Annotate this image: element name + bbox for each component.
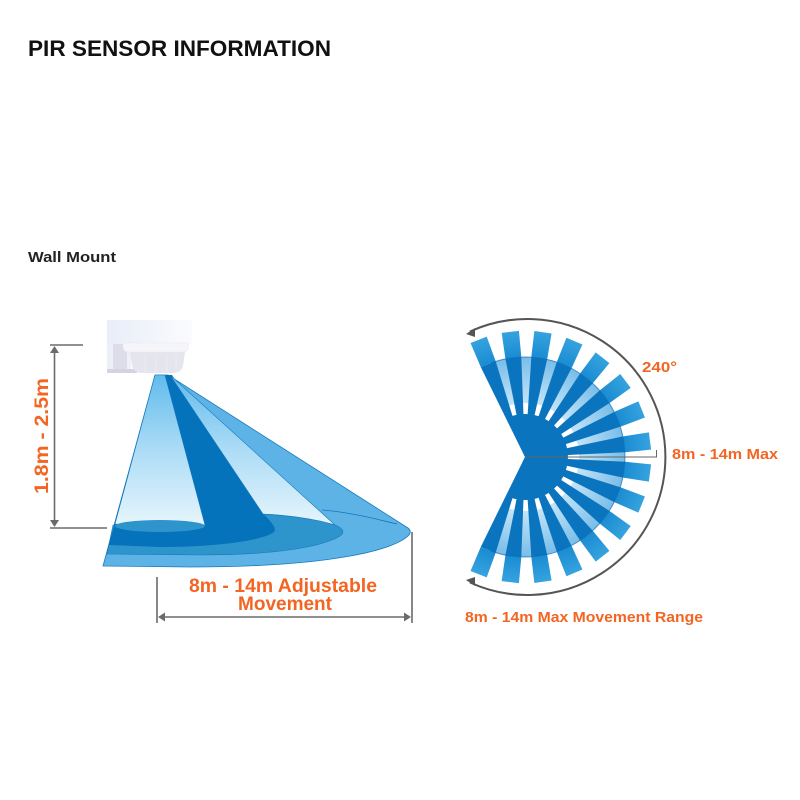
height label: 1.8m - 2.5m xyxy=(31,378,53,494)
central dark sector xyxy=(507,414,568,500)
radius line xyxy=(525,450,656,457)
upper detection bars xyxy=(471,331,651,466)
height dimension arrow xyxy=(50,345,107,528)
outer zone inner contour xyxy=(322,510,397,524)
light ring xyxy=(491,357,625,557)
middle detection ellipse xyxy=(107,514,343,555)
subheading: wall mount: Wall Mount xyxy=(28,249,116,266)
outer detection zone xyxy=(103,375,410,567)
max movement range label: 8m - 14m Max Movement Range xyxy=(465,610,703,626)
width dimension arrow xyxy=(157,532,412,623)
240 degree arc arrow xyxy=(466,319,665,595)
lower detection bars xyxy=(471,448,651,583)
top view detection fan xyxy=(471,331,651,583)
light beam right xyxy=(170,375,335,525)
light beam left xyxy=(115,375,205,525)
dark detection wedge xyxy=(108,375,275,547)
adjustable movement label: Movement xyxy=(238,594,333,615)
icon: PIR sensor xyxy=(107,320,192,373)
side view detection diagram xyxy=(103,375,410,567)
240 degree label: 240° xyxy=(642,359,677,376)
adjustable movement label: 8m - 14m Adjustable xyxy=(189,576,377,597)
near detection ellipse xyxy=(115,520,205,532)
max range label: 8m - 14m Max xyxy=(672,447,778,463)
adjustable movement label xyxy=(189,576,377,615)
title: PIR SENSOR INFORMATION xyxy=(28,36,331,61)
